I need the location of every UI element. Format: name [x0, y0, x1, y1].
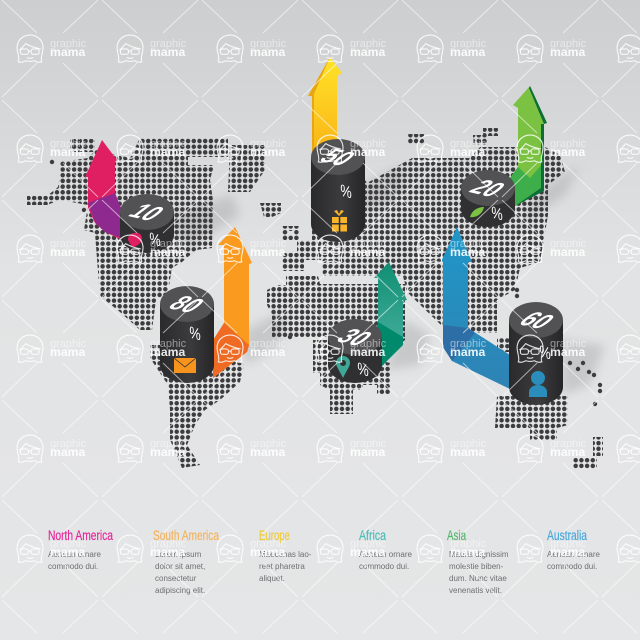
- watermark: logos and wordmarks: graphic: [350, 538, 387, 550]
- legend: south america: Lorem ipsum: [155, 550, 202, 559]
- cylinder: 20 percent: [461, 170, 515, 227]
- watermark: logos and wordmarks: mama: [50, 545, 85, 559]
- watermark: logos and wordmarks: graphic: [450, 138, 487, 150]
- legend: south america: adipiscing elit.: [155, 586, 205, 595]
- arrow: magenta: [85, 140, 122, 240]
- legend: australia: Australia: [547, 527, 587, 543]
- cylinder: 10 percent: %: [149, 229, 161, 251]
- cylinder: 80 percent: 80: [161, 291, 212, 317]
- watermark: logos and wordmarks: graphic: [50, 38, 87, 50]
- legend: asia: dum. Nunc vitae: [449, 574, 507, 583]
- watermark: logos and wordmarks: mama: [550, 445, 585, 459]
- watermark: logos and wordmarks: mama: [250, 345, 285, 359]
- legend: europe: aliquet.: [259, 574, 285, 583]
- watermark: logos and wordmarks: mama: [350, 445, 385, 459]
- watermark: logos and wordmarks: mama: [350, 45, 385, 59]
- watermark: logos and wordmarks: graphic: [150, 138, 187, 150]
- watermark: logos and wordmarks: graphic: [450, 238, 487, 250]
- watermark: logos and wordmarks: mama: [150, 245, 185, 259]
- watermark: logos and wordmarks: graphic: [450, 438, 487, 450]
- map: island dots: [50, 160, 602, 406]
- watermark: logos and wordmarks: graphic: [450, 38, 487, 50]
- cylinder shadows: [170, 165, 605, 395]
- watermark: logos and wordmarks: graphic: [50, 538, 87, 550]
- legend: australia: [547, 527, 600, 571]
- watermark: logos and wordmarks: graphic: [50, 238, 87, 250]
- cylinder: 30 percent: %: [357, 359, 369, 381]
- watermark: logos and wordmarks: mama: [250, 445, 285, 459]
- cylinder: 30 percent: 30: [329, 324, 380, 350]
- legend: asia: molestie biben-: [449, 562, 504, 571]
- icon: heart: [128, 233, 142, 247]
- watermark: logos and wordmarks: mama: [50, 145, 85, 159]
- legend: africa: Africa: [359, 527, 386, 543]
- cylinder: 10 percent: 10: [121, 199, 172, 225]
- legend: south america: South America: [153, 527, 219, 543]
- icon: gift: [332, 210, 347, 232]
- cylinder: 60 percent: 60: [512, 307, 562, 333]
- watermark: logos and wordmarks: mama: [550, 145, 585, 159]
- legend: asia: venenatis velit.: [449, 586, 502, 595]
- watermark: logos and wordmarks: mama: [150, 445, 185, 459]
- cylinder: 60 percent: %: [539, 342, 551, 364]
- watermark: logos and wordmarks: mama: [50, 345, 85, 359]
- watermark: logos and wordmarks: graphic: [250, 538, 287, 550]
- watermark: logos and wordmarks: graphic: [150, 538, 187, 550]
- legend: europe: reet pharetra: [259, 562, 305, 571]
- watermark: logos and wordmarks: mama: [250, 145, 285, 159]
- watermark: logos and wordmarks: graphic: [250, 438, 287, 450]
- watermark: logos and wordmarks: mama: [450, 145, 485, 159]
- cylinder: 20 percent: %: [491, 203, 503, 225]
- legend: asia: [447, 527, 509, 595]
- legend: australia: commodo dui.: [547, 562, 597, 571]
- watermark: logos and wordmarks: graphic: [50, 138, 87, 150]
- watermark: logos and wordmarks: graphic: [550, 138, 587, 150]
- cylinder: 30 percent: [328, 319, 382, 383]
- watermark: logos and wordmarks: graphic: [250, 38, 287, 50]
- legend: australia: Aenean ornare: [547, 550, 600, 559]
- legend: asia: Mauris dignissim: [449, 550, 509, 559]
- arrow: green: [510, 86, 547, 209]
- watermark: logos and wordmarks: graphic: [450, 338, 487, 350]
- watermark: logos and wordmarks: graphic: [450, 538, 487, 550]
- watermark: logos and wordmarks: mama: [250, 245, 285, 259]
- legend: europe: [259, 527, 312, 583]
- watermark: logos and wordmarks: mama: [550, 345, 585, 359]
- watermark: logos and wordmarks: mama: [550, 545, 585, 559]
- legend: [48, 527, 600, 595]
- watermark: logos and wordmarks: mama: [550, 45, 585, 59]
- watermark: logos and wordmarks: mama: [550, 245, 585, 259]
- watermark: logos and wordmarks: mama: [150, 45, 185, 59]
- watermark: logos and wordmarks: graphic: [350, 438, 387, 450]
- watermark: logos and wordmarks: mama: [150, 145, 185, 159]
- arrow: blue: [441, 227, 510, 389]
- world dot map: [0, 130, 640, 466]
- watermark: logos and wordmarks: mama: [450, 245, 485, 259]
- watermark: logos and wordmarks: graphic: [50, 338, 87, 350]
- watermark: logos and wordmarks: graphic: [350, 38, 387, 50]
- legend: south america: consectetur: [155, 574, 197, 583]
- watermark: logos and wordmarks: graphic: [550, 538, 587, 550]
- cylinder: 10 percent: [120, 194, 174, 253]
- legend: europe: Maecenas lao-: [259, 550, 312, 559]
- icon: map pin: [336, 356, 350, 378]
- legend: north america: North America: [48, 527, 113, 543]
- watermark: logos and wordmarks: graphic: [350, 138, 387, 150]
- watermark: logos and wordmarks: mama: [250, 545, 285, 559]
- legend: south america: [153, 527, 219, 595]
- watermark: logos and wordmarks: graphic: [150, 238, 187, 250]
- watermark: logos and wordmarks: graphic: [50, 438, 87, 450]
- legend: africa: [359, 527, 412, 571]
- cylinder: 60 percent: [509, 302, 563, 405]
- watermark: logos and wordmarks: graphic: [350, 338, 387, 350]
- icon: person: [529, 371, 547, 397]
- arrow: teal: [370, 262, 407, 366]
- watermark: logos and wordmarks: mama: [150, 345, 185, 359]
- legend: north america: commodo dui.: [48, 562, 98, 571]
- legend: europe: Europe: [259, 527, 290, 543]
- watermark: logos and wordmarks: graphic: [550, 38, 587, 50]
- watermark: logos and wordmarks: mama: [350, 545, 385, 559]
- watermark: logos and wordmarks: mama: [50, 45, 85, 59]
- watermark: logos and wordmarks: mama: [50, 445, 85, 459]
- watermark: logos and wordmarks: graphic: [150, 38, 187, 50]
- legend: north america: Aenean ornare: [48, 550, 101, 559]
- legend: asia: Asia: [447, 527, 466, 543]
- watermark: logos and wordmarks: mama: [350, 245, 385, 259]
- cylinder: 50 percent: [311, 139, 365, 242]
- watermark: logos and wordmarks: mama: [250, 45, 285, 59]
- watermark: logos and wordmarks: graphic: [150, 438, 187, 450]
- icon: leaf: [470, 207, 484, 217]
- watermark: logos and wordmarks: graphic: [150, 338, 187, 350]
- watermark: logos and wordmarks: mama: [450, 545, 485, 559]
- watermark: logos and wordmarks: mama: [450, 345, 485, 359]
- arrow: yellow: [308, 57, 342, 160]
- legend: africa: commodo dui.: [359, 562, 409, 571]
- cylinder: 80 percent: [160, 286, 214, 383]
- watermark: logos and wordmarks: graphic: [250, 238, 287, 250]
- legend: north america: [48, 527, 113, 571]
- cylinder: 50 percent: %: [340, 181, 352, 203]
- legend: south america: dolor sit amet,: [155, 562, 205, 571]
- cylinder: 50 percent: 50: [312, 144, 363, 170]
- watermark: logos and wordmarks: graphic: [550, 238, 587, 250]
- watermark: logos and wordmarks: mama: [450, 445, 485, 459]
- watermark: logos and wordmarks: mama: [50, 245, 85, 259]
- legend: africa: Aenean ornare: [359, 550, 412, 559]
- cylinder: 80 percent: %: [189, 323, 201, 345]
- watermark: logos and wordmarks: mama: [350, 345, 385, 359]
- watermark: logos and wordmarks: graphic: [550, 338, 587, 350]
- watermark: logos and wordmarks: mama: [150, 545, 185, 559]
- icon: envelope: [174, 358, 196, 373]
- cylinder: 20 percent: 20: [462, 175, 513, 201]
- watermark: logos and wordmarks: graphic: [350, 238, 387, 250]
- arrow: orange: [213, 227, 252, 378]
- watermark: logos and wordmarks: graphic: [550, 438, 587, 450]
- watermark: logos and wordmarks: graphic: [250, 338, 287, 350]
- watermark: logos and wordmarks: graphic: [250, 138, 287, 150]
- watermark: logos and wordmarks: mama: [350, 145, 385, 159]
- watermark: logos and wordmarks: mama: [450, 45, 485, 59]
